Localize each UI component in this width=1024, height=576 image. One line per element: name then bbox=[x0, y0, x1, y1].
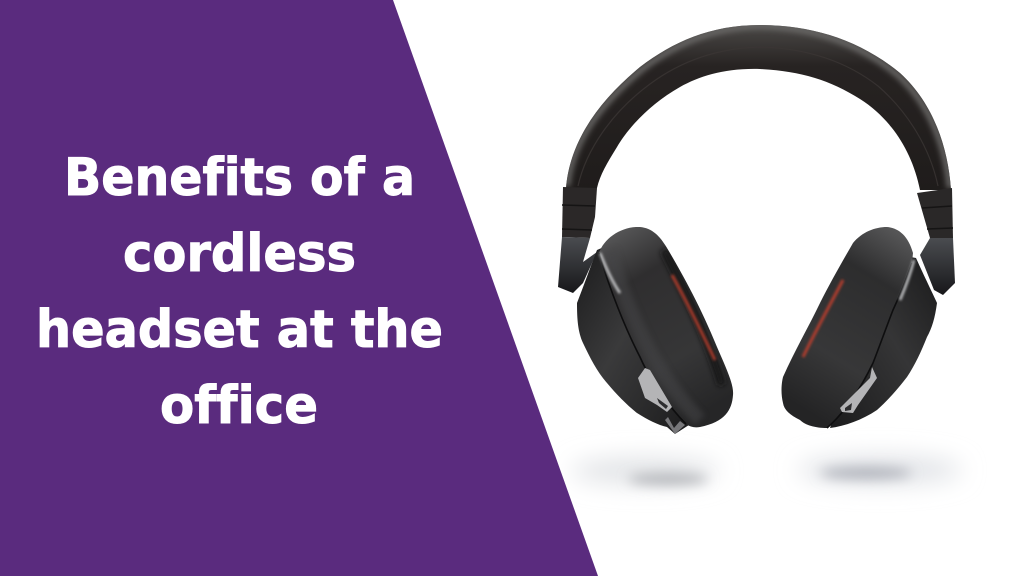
headband bbox=[566, 25, 951, 190]
red accent bbox=[803, 280, 843, 357]
title: headset at the bbox=[36, 300, 443, 360]
image: headphones bbox=[558, 25, 957, 494]
floor shadows bbox=[571, 456, 962, 485]
red accent bbox=[672, 275, 715, 360]
right slider bbox=[917, 188, 955, 295]
left ear cup bbox=[577, 227, 733, 434]
silver connector bbox=[638, 368, 685, 434]
title: office bbox=[160, 376, 318, 436]
shell bbox=[577, 240, 692, 434]
silver connector bbox=[840, 367, 877, 413]
title: cordless bbox=[123, 224, 356, 284]
left slider bbox=[558, 187, 597, 293]
right ear cup bbox=[782, 227, 937, 428]
pad bbox=[782, 227, 913, 428]
seam line bbox=[827, 263, 912, 428]
seam line bbox=[599, 253, 686, 424]
shell bbox=[830, 255, 937, 428]
title: Benefits of a bbox=[64, 148, 415, 208]
silver trim bbox=[600, 253, 620, 293]
pad bbox=[599, 227, 733, 427]
silver trim bbox=[900, 260, 914, 300]
